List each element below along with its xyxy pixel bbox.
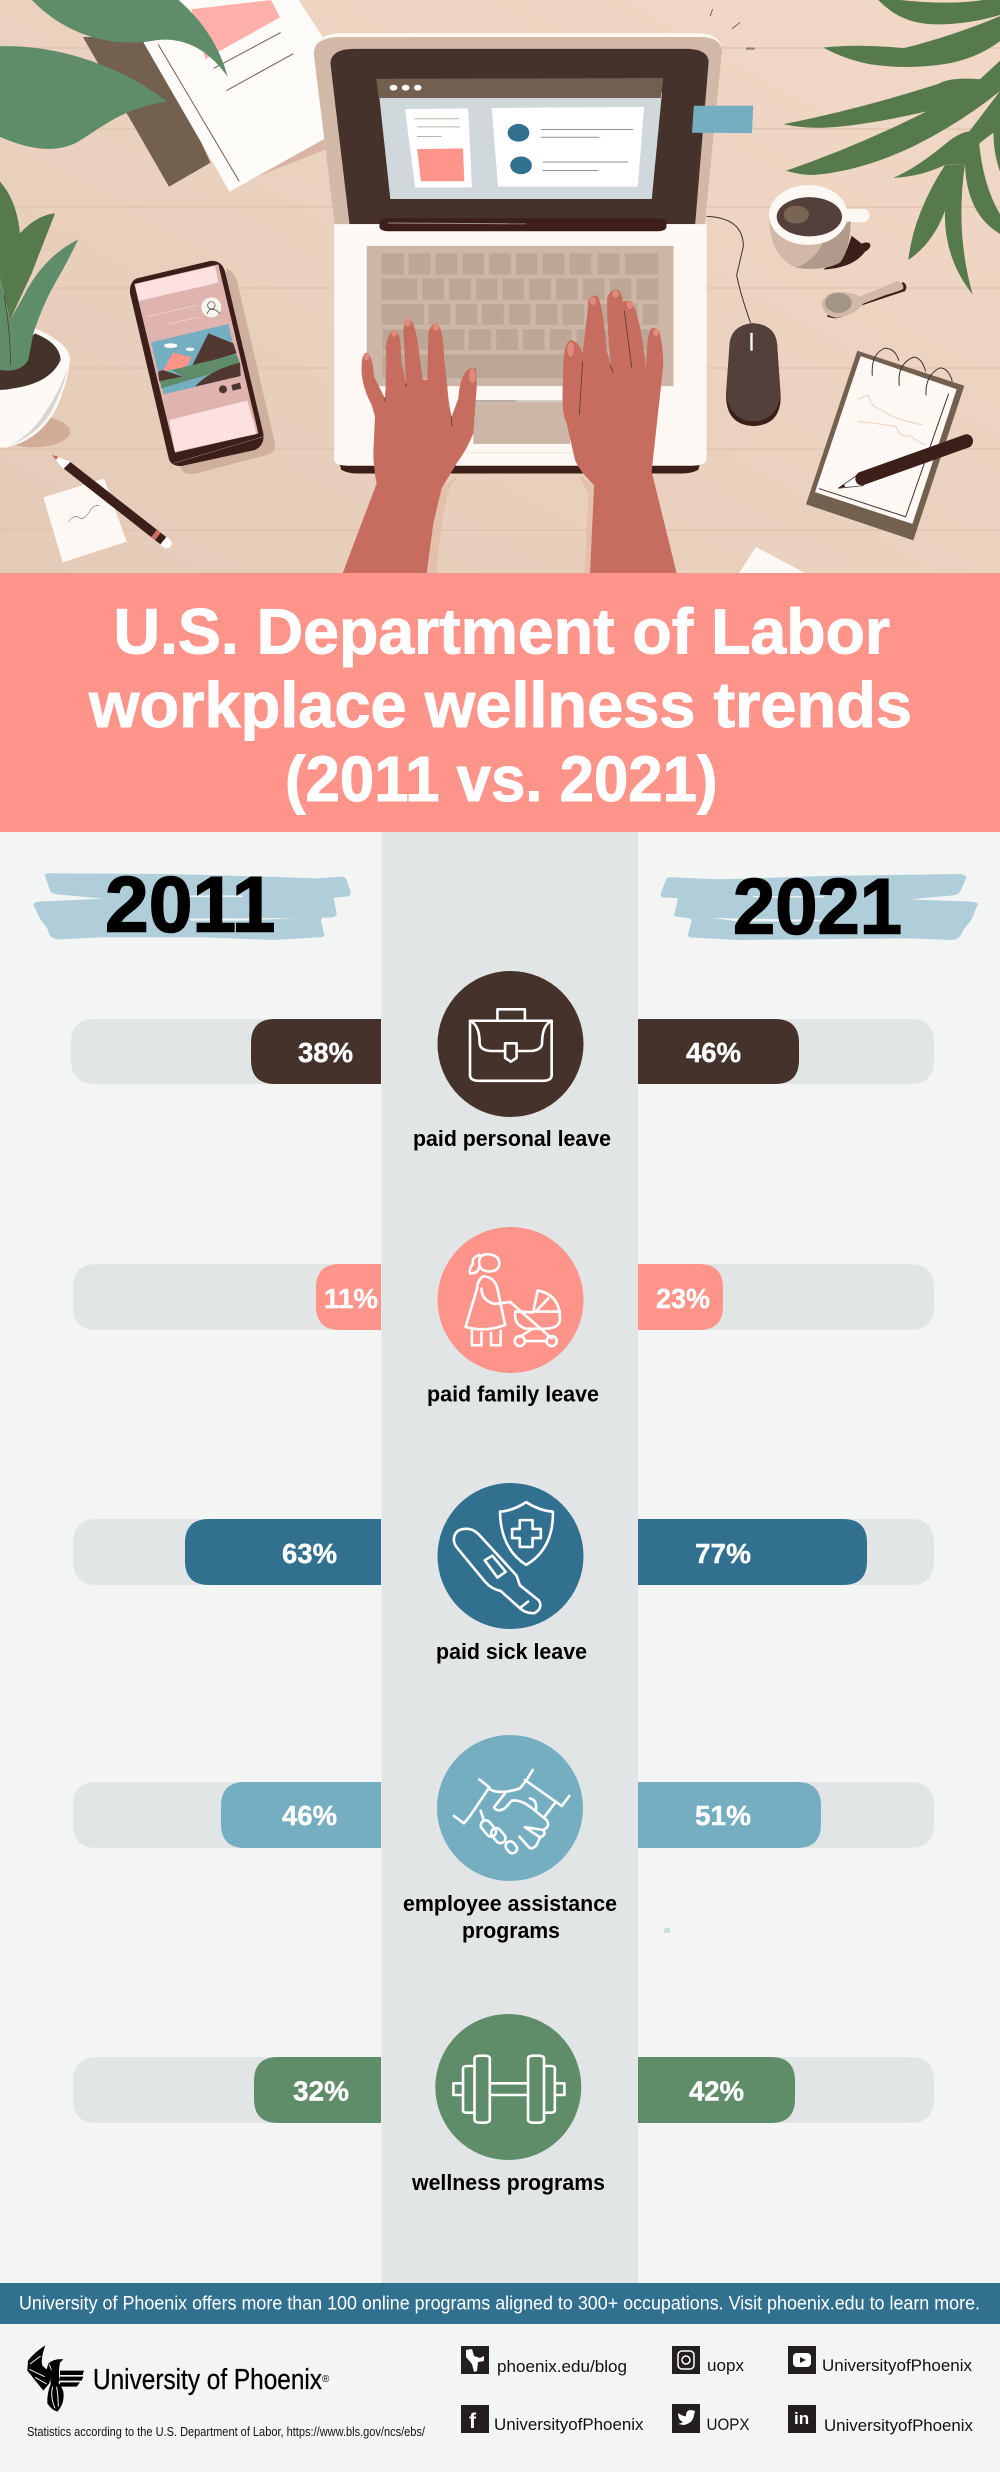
- coffee cup and spoon: [769, 185, 906, 318]
- year header: 2011: [34, 860, 351, 948]
- icon: handshake: [437, 1735, 583, 1881]
- social: blog: [461, 2346, 627, 2376]
- social: facebook: [461, 2405, 644, 2434]
- mouse and cable: [707, 216, 781, 426]
- hero illustration: desk with laptop and hands: [0, 0, 1000, 573]
- title text: (2011 vs. 2021): [285, 743, 718, 815]
- source note: Statistics according to the U.S. Department of Labor, https://www.bls.gov/ncs/ebs/: [27, 2424, 425, 2439]
- fern leaves top right: [710, 0, 1000, 295]
- 2021 bar: 46%: [638, 1019, 934, 1084]
- 2021 bar: 42%: 42%: [689, 2076, 744, 2106]
- social: instagram: uopx: [707, 2356, 744, 2375]
- 2021 bar: 51%: 51%: [695, 1800, 751, 1831]
- 2021 bar: 77%: 77%: [695, 1538, 751, 1569]
- social: linkedin: [788, 2405, 973, 2435]
- potted plant left: [0, 182, 78, 448]
- social: facebook: f: [469, 2410, 477, 2433]
- row: paid family leave: [73, 1227, 934, 1406]
- label: wellness programs: [411, 2170, 605, 2195]
- row: paid personal leave: [71, 971, 934, 1151]
- social: youtube: [788, 2346, 972, 2375]
- year header: 2011: 2011: [105, 860, 276, 948]
- 2021 bar: 46%: 46%: [686, 1037, 741, 1068]
- social: instagram: [672, 2346, 744, 2375]
- label: paid family leave: [427, 1382, 599, 1406]
- 2021 bar: 23%: [638, 1264, 934, 1330]
- social: facebook: UniversityofPhoenix: [494, 2415, 644, 2434]
- social: twitter: [672, 2404, 750, 2434]
- laptop: [314, 33, 753, 473]
- 2021 bar: 23%: 23%: [656, 1283, 710, 1314]
- icon: dumbbell: [435, 2014, 581, 2160]
- 2011 bar: 32%: 32%: [293, 2076, 349, 2106]
- social: youtube: UniversityofPhoenix: [822, 2356, 972, 2375]
- label: [403, 1891, 617, 1943]
- social: twitter: UOPX: [706, 2415, 750, 2434]
- icon: mother with stroller: [438, 1227, 584, 1373]
- 2011 bar: 46%: [73, 1782, 381, 1848]
- label: employee assistance: [403, 1891, 617, 1916]
- 2021 bar: 51%: [638, 1782, 934, 1848]
- year header: 2021: [661, 862, 978, 950]
- icon: phoenix bird: [27, 2345, 84, 2412]
- label: paid personal leave: [413, 1126, 611, 1151]
- label: programs: [462, 1918, 560, 1943]
- notepad and pen: [806, 348, 967, 540]
- 2011 bar: 11%: [73, 1264, 381, 1330]
- title text: U.S. Department of Labor: [114, 596, 890, 668]
- row: paid sick leave: [73, 1483, 934, 1664]
- year header: 2021: 2021: [733, 862, 902, 950]
- 2011 bar: 32%: [73, 2057, 381, 2123]
- 2011 bar: 11%: 11%: [324, 1283, 378, 1314]
- title text: workplace wellness trends: [88, 669, 912, 741]
- title text: [88, 596, 912, 815]
- wordmark: University of Phoenix: [93, 2364, 322, 2396]
- promo band: [0, 2283, 1000, 2324]
- icon: thermometer and shield: [438, 1483, 584, 1629]
- hands on keyboard: [343, 290, 677, 573]
- 2011 bar: 46%: 46%: [282, 1800, 337, 1831]
- documents on desk: [83, 0, 325, 192]
- icon: briefcase: [438, 971, 584, 1117]
- 2011 bar: 38%: 38%: [298, 1037, 353, 1068]
- title banner: [0, 573, 1000, 832]
- 2021 bar: 42%: [638, 2057, 934, 2123]
- logo: University of Phoenix: ®: [322, 2374, 330, 2385]
- 2011 bar: 63%: 63%: [282, 1538, 337, 1569]
- 2011 bar: 63%: [73, 1519, 381, 1585]
- 2011 bar: 38%: [71, 1019, 381, 1084]
- social: linkedin: in: [794, 2409, 809, 2428]
- social: linkedin: UniversityofPhoenix: [824, 2416, 973, 2435]
- plant leaves top left: [0, 0, 228, 149]
- 2021 bar: 77%: [638, 1519, 934, 1585]
- label: paid sick leave: [436, 1639, 587, 1664]
- social: blog: phoenix.edu/blog: [497, 2357, 627, 2376]
- row: employee assistance programs: [73, 1735, 934, 1943]
- logo: University of Phoenix: [27, 2345, 330, 2412]
- row: wellness programs: [73, 2014, 934, 2195]
- center column: [382, 832, 638, 2283]
- pencil and sticky note: [43, 455, 167, 562]
- phone: [130, 261, 275, 474]
